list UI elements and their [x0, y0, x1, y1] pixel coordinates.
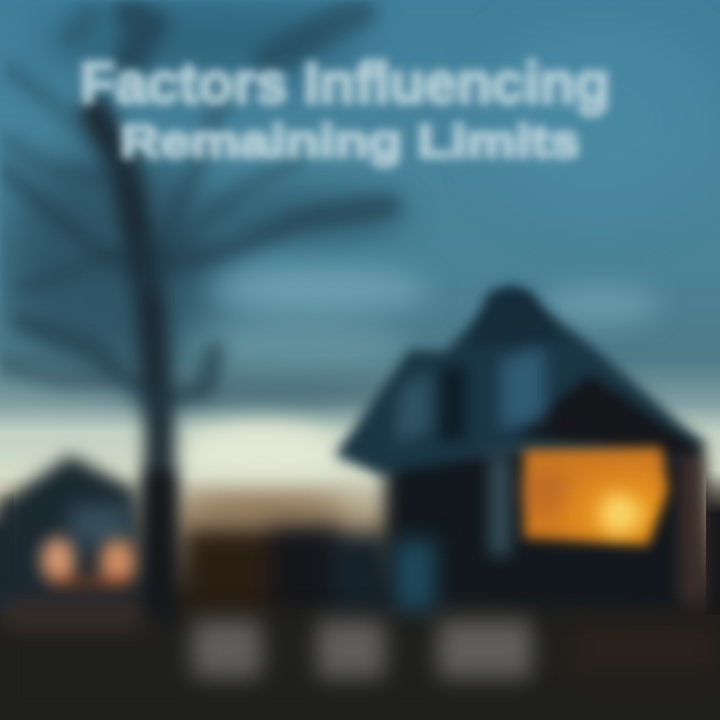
ground [0, 600, 720, 720]
sky clouds and horizon glow [0, 2, 715, 526]
main house [335, 283, 705, 610]
roof [335, 283, 705, 475]
right edge of foreground [706, 470, 720, 615]
title: Factors Influencing Remaining Limits [80, 51, 610, 167]
title: Factors Influencing Remaining Limits: Factors Influencing [80, 51, 610, 116]
treeline on horizon [185, 525, 390, 620]
stat blocks on ground [192, 620, 532, 678]
glowing windows [41, 537, 136, 587]
title: Factors Influencing Remaining Limits: Remaining Limits [120, 115, 580, 167]
distant house on left [0, 455, 140, 610]
foreground trunk [145, 470, 175, 620]
block three [438, 620, 532, 678]
tree: bare trunk and branches [5, 12, 390, 620]
block two [317, 620, 385, 678]
house body [385, 440, 700, 610]
block one [192, 620, 262, 678]
left edge of distant house [0, 490, 14, 615]
support column and porch [490, 455, 510, 555]
glowing window [524, 447, 668, 545]
